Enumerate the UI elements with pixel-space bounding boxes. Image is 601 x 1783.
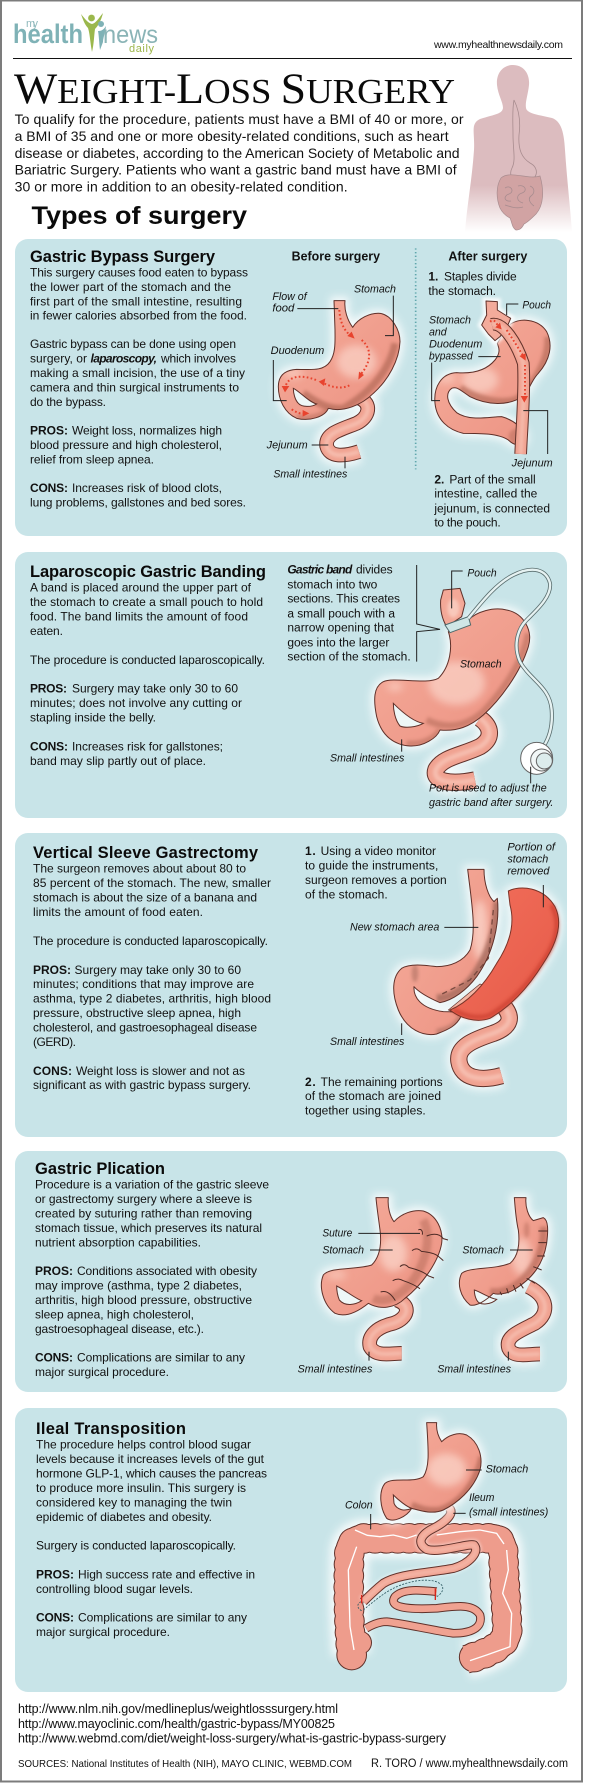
description text (30, 581, 265, 768)
illustration: plicated stomach (459, 1198, 548, 1355)
source links: http://www.webmd.com/diet/weight-loss-surgery/what-is-gastric-bypass-surgery (18, 1732, 447, 1746)
step 2 text: Part of the small (449, 472, 536, 486)
source links: http://www.mayoclinic.com/health/gastric-bypass/MY00825 (18, 1717, 335, 1731)
description text: Procedure is a variation of the gastric sleeve (35, 1178, 269, 1192)
step 1 text: Using a video monitor (321, 844, 436, 858)
description text: stomach tissue, which preserves its natural (35, 1221, 262, 1235)
step 2 text: of the stomach are joined (305, 1089, 441, 1103)
header rule (13, 58, 572, 59)
description text: relief from sleep apnea. (30, 452, 154, 466)
illustration: small intestine loops (358, 1507, 481, 1633)
step 1 text (428, 270, 517, 298)
step 1 text: Staples divide (444, 270, 517, 284)
illustration: stomach after surgery (435, 301, 550, 454)
label: flow of food (272, 291, 338, 315)
label: small intestines right: Small intestines (437, 1363, 511, 1375)
intro text: 30 or more in addition to an obesity-related condition. (15, 178, 348, 194)
heading: types of surgery: Types of surgery (32, 202, 247, 230)
heading: Vertical Sleeve Gastrectomy (33, 844, 259, 862)
intro text (15, 111, 464, 194)
description text: lung problems, gallstones and bed sores. (30, 496, 246, 510)
label: stomach and duodenum bypassed: Duodenum (429, 338, 482, 350)
description text: 85 percent of the stomach. The new, smaller (33, 876, 271, 890)
illustration: colon (348, 1530, 512, 1661)
label: small intestines (330, 1023, 405, 1048)
label: stomach and duodenum bypassed: and (429, 326, 447, 338)
description text: pressure, obstructive sleep apnea, high (33, 1006, 241, 1020)
gastric band text: stomach into two (287, 577, 378, 591)
heading: Ileal Transposition (36, 1420, 186, 1438)
description text: controlling blood sugar levels. (36, 1582, 193, 1596)
description text: PROS: (36, 1567, 74, 1581)
label: stomach and duodenum bypassed: Stomach (429, 314, 471, 326)
description text: the lower part of the stomach and the (30, 280, 231, 294)
description text: A band is placed around the upper part of (30, 581, 252, 595)
label: stomach and duodenum bypassed: bypassed (429, 350, 473, 362)
description text: do the bypass. (30, 395, 106, 409)
label: port (429, 767, 553, 809)
description text: Complications are similar to any (77, 1351, 245, 1365)
description text: Increases risk for gallstones; (72, 740, 223, 754)
step 2 text: intestine, called the (434, 487, 538, 501)
description text: CONS: (30, 740, 68, 754)
label: stomach (466, 1464, 528, 1476)
label: port: Port is used to adjust the (429, 782, 547, 794)
label: portion of stomach removed: Portion of (507, 842, 557, 854)
gastric band text: divides (356, 562, 393, 576)
panel background (15, 239, 567, 536)
step 2 text: jejunum, is connected (433, 501, 550, 515)
description text: the stomach to create a small pouch to hold (30, 595, 263, 609)
panel: gastric bypass surgery (15, 239, 567, 536)
description text (36, 1438, 267, 1639)
label: portion of stomach removed (507, 842, 557, 907)
description text: PROS: (30, 424, 68, 438)
description text: Weight loss is slower and not as (76, 1064, 245, 1078)
author credit: R. TORO / www.myhealthnewsdaily.com (371, 1758, 568, 1770)
description text: levels because it increases levels of the gut (36, 1452, 265, 1466)
label: new stomach area: New stomach area (350, 922, 439, 934)
label: flow of food: food (272, 303, 295, 315)
panel background (15, 833, 567, 1137)
description text: High success rate and effective in (78, 1567, 255, 1581)
step 2 text (305, 1075, 443, 1117)
label: small intestines right (437, 1352, 511, 1375)
step 1 text (305, 844, 447, 901)
intro text: Bariatric Surgery. Patients who want a gastric band must have a BMI of (15, 162, 457, 178)
diagram: before and after gastric bypass (266, 248, 553, 530)
description text: sleep apnea, high cholesterol, (35, 1307, 194, 1321)
logo: my health news daily: news (103, 21, 158, 49)
description text: or gastrectomy surgery where a sleeve is (35, 1192, 252, 1206)
step 1 text: the stomach. (428, 284, 496, 298)
description text: CONS: (35, 1351, 73, 1365)
intro text: disease or diabetes, according to the American Society of Metabolic and (15, 145, 460, 161)
description text: camera and thin surgical instruments to (30, 380, 239, 394)
heading: after surgery: After surgery (448, 249, 528, 264)
label: pouch (507, 299, 551, 315)
description text: Surgery is conducted laparoscopically. (36, 1539, 236, 1553)
description text: may improve (asthma, type 2 diabetes, (35, 1279, 242, 1293)
heading: Gastric Plication (35, 1160, 165, 1178)
heading: Gastric Bypass Surgery (30, 248, 216, 266)
description text: Gastric bypass can be done using open (30, 337, 236, 351)
description text: Complications are similar to any (78, 1611, 247, 1625)
source links: http://www.nlm.nih.gov/medlineplus/weightlosssurgery.html (18, 1702, 338, 1716)
description text: considered key to managing the twin (36, 1495, 232, 1509)
label: small intestines (298, 1352, 373, 1375)
description text: making a small incision, the use of a tiny (30, 366, 245, 380)
description text: minutes; conditions that may improve are (33, 977, 254, 991)
description text: Weight loss, normalizes high (72, 424, 222, 438)
description text: (GERD). (33, 1035, 76, 1049)
gastric band text: goes into the larger (287, 635, 389, 649)
description text: This surgery causes food eaten to bypass (30, 266, 248, 280)
label: small intestines (273, 457, 348, 480)
label: small intestines: Small intestines (330, 1036, 405, 1048)
description text: blood pressure and high cholesterol, (30, 438, 222, 452)
description text: Surgery may take only 30 to 60 (74, 963, 241, 977)
description text: nutrient absorption capabilities. (35, 1235, 201, 1249)
panel: ileal transposition (15, 1408, 567, 1692)
label: stomach right: Stomach (462, 1244, 504, 1256)
description text: major surgical procedure. (35, 1365, 169, 1379)
logo: my health news daily: daily (129, 43, 154, 55)
website url: www.myhealthnewsdaily.com (433, 39, 563, 51)
description text: The surgeon removes about about 80 to (33, 862, 246, 876)
label: stomach: Stomach (486, 1464, 528, 1476)
description text (33, 862, 271, 1092)
label: flow of food: Flow of (272, 291, 308, 303)
label: small intestines: Small intestines (330, 753, 405, 765)
description text: PROS: (35, 1264, 73, 1278)
intro text: To qualify for the procedure, patients must have a BMI of 40 or more, or (15, 111, 464, 127)
description text (35, 1178, 269, 1379)
description text: Increases risk of blood clots, (72, 481, 222, 495)
label: ileum: Ileum (469, 1492, 494, 1504)
panel background (15, 1408, 567, 1692)
label: pouch: Pouch (522, 299, 551, 311)
label: jejunum: Jejunum (266, 439, 308, 451)
step 1 text: 1. (305, 844, 316, 858)
gastric band text: a small pouch with a (287, 606, 395, 620)
label: portion of stomach removed: removed (507, 866, 550, 878)
description text: gastroesophageal disease, etc.). (35, 1322, 204, 1336)
illustration: stomach before surgery (278, 301, 400, 455)
description text: hormone GLP-1, which causes the pancreas (36, 1466, 267, 1480)
gastric band text: Gastric band (287, 562, 353, 576)
label: stomach: Stomach (354, 283, 396, 295)
label: suture (322, 1228, 420, 1240)
description text: food. The band limits the amount of food (30, 610, 248, 624)
description text: to produce more insulin. This surgery is (36, 1481, 246, 1495)
dotted divider (413, 248, 418, 469)
icon: human torso silhouette with digestive tract (465, 65, 572, 232)
diagram: ileal transposition (345, 1423, 549, 1661)
description text: eaten. (30, 624, 63, 638)
label: jejunum (266, 439, 328, 451)
gastric band text: sections. This creates (287, 592, 400, 606)
description text: limits the amount of food eaten. (33, 905, 203, 919)
description text: laparoscopy, (90, 352, 157, 366)
label: stomach (354, 283, 396, 336)
description text: The procedure is conducted laparoscopically. (33, 934, 268, 948)
description text: surgery, or (30, 352, 87, 366)
step 1 text: of the stomach. (305, 887, 388, 901)
title: WEIGHT-LOSS SURGERY (14, 66, 455, 113)
step 2 text: 2. (434, 472, 444, 486)
illustration: stomach with sutures (321, 1198, 448, 1354)
description text: Conditions associated with obesity (77, 1264, 257, 1278)
label: pouch: Pouch (467, 568, 497, 580)
description text: significant as with gastric bypass surgery. (33, 1078, 251, 1092)
description text: minutes; does not involve any cutting or (30, 696, 242, 710)
intro text: a BMI of 35 and one or more obesity-related conditions, such as heart (15, 128, 449, 144)
description text: major surgical procedure. (36, 1625, 170, 1639)
panel background (15, 552, 567, 818)
label: colon (345, 1499, 373, 1529)
label: stomach: Stomach (460, 659, 502, 671)
bracket pointer (417, 565, 440, 662)
step 1 text: to guide the instruments, (305, 858, 438, 872)
heading: before surgery: Before surgery (292, 249, 381, 264)
label: stomach right (462, 1244, 533, 1256)
label: jejunum after (511, 411, 553, 470)
label: stomach: Stomach (322, 1244, 364, 1256)
description text: which involves (160, 352, 236, 366)
description text: CONS: (33, 1064, 72, 1078)
label: ileum (453, 1492, 549, 1519)
label: ileum: (small intestines) (469, 1507, 549, 1519)
gastric band text: narrow opening that (287, 621, 395, 635)
gastric band text (287, 562, 411, 664)
description text: arthritis, high blood pressure, obstructive (35, 1293, 252, 1307)
step 2 text (433, 472, 550, 530)
source links (18, 1702, 447, 1746)
description text: stapling inside the belly. (30, 711, 156, 725)
step 2 text: together using staples. (305, 1103, 426, 1117)
description text: CONS: (36, 1611, 74, 1625)
description text: cholesterol, and gastroesophageal disease (33, 1020, 257, 1034)
heading: Laparoscopic Gastric Banding (30, 563, 266, 581)
label: suture: Suture (322, 1228, 352, 1240)
label: small intestines (330, 739, 405, 765)
step 2 text: The remaining portions (321, 1075, 443, 1089)
description text: first part of the small intestine, resulting (30, 294, 242, 308)
panel background (15, 1151, 567, 1392)
description text: created by suturing rather than removing (35, 1206, 252, 1220)
diagram: sleeve gastrectomy (305, 842, 559, 1117)
gastric band text: section of the stomach. (287, 650, 411, 664)
label: port: gastric band after surgery. (429, 797, 553, 809)
logo: my health news daily: health (13, 19, 83, 49)
label: stomach and duodenum bypassed (429, 314, 501, 401)
label: duodenum: Duodenum (271, 345, 324, 357)
label: pouch (452, 568, 497, 608)
description text: PROS: (30, 682, 67, 696)
logo: my health news daily: my (26, 18, 38, 30)
description text: The procedure helps control blood sugar (36, 1438, 251, 1452)
panel: laparoscopic gastric banding (15, 552, 567, 818)
description text (30, 266, 248, 510)
label: jejunum after: Jejunum (511, 458, 553, 470)
panel: vertical sleeve gastrectomy (15, 833, 567, 1137)
description text: band may slip partly out of place. (30, 754, 206, 768)
description text: asthma, type 2 diabetes, arthritis, high blood (33, 992, 271, 1006)
description text: epidemic of diabetes and obesity. (36, 1510, 212, 1524)
description text: PROS: (33, 963, 71, 977)
illustration: stomach with band and port (375, 570, 553, 782)
step 1 text: 1. (428, 270, 438, 284)
label: colon: Colon (345, 1499, 373, 1511)
label: small intestines: Small intestines (298, 1363, 373, 1375)
illustration: remaining stomach and removed portion (394, 869, 559, 1078)
diagram: gastric plication (298, 1198, 548, 1375)
panel: gastric plication (15, 1151, 567, 1392)
description text: The procedure is conducted laparoscopically. (30, 653, 265, 667)
description text: in fewer calories absorbed from the food. (30, 309, 247, 323)
label: small intestines: Small intestines (273, 468, 348, 480)
step 2 text: to the pouch. (434, 516, 501, 530)
illustration: stomach (381, 1423, 482, 1520)
step 1 text: surgeon removes a portion (305, 873, 447, 887)
description text: Surgery may take only 30 to 60 (72, 682, 238, 696)
logo: my health news daily (13, 13, 158, 55)
label: duodenum (271, 345, 324, 401)
label: stomach (322, 1244, 393, 1256)
diagram: gastric band (287, 562, 553, 809)
description text: stomach is about the size of a banana and (33, 891, 257, 905)
step 2 text: 2. (305, 1075, 316, 1089)
label: portion of stomach removed: stomach (507, 854, 548, 866)
sources credit: SOURCES: National Institutes of Health (NIH), MAYO CLINIC, WEBMD.COM (18, 1758, 352, 1770)
description text: CONS: (30, 481, 68, 495)
